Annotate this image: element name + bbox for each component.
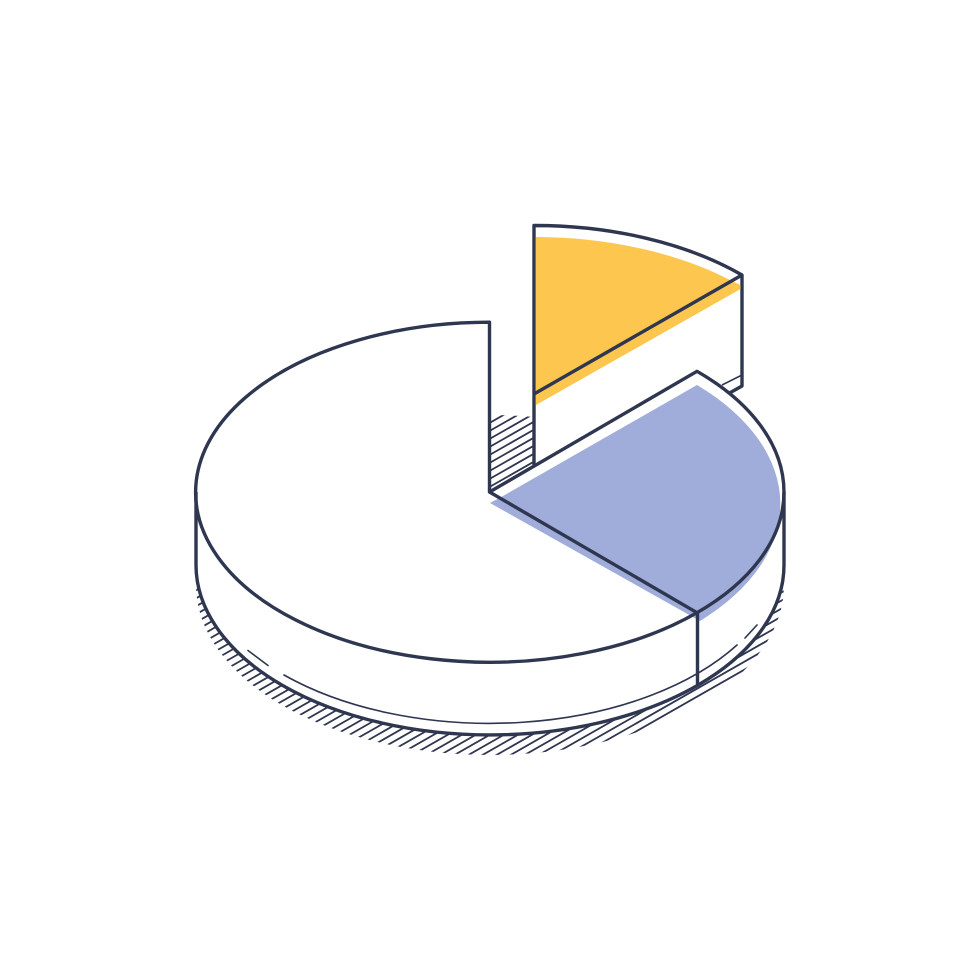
raised yellow slice: [534, 225, 742, 500]
pie silhouette: [196, 322, 784, 735]
pie side outline: [196, 492, 784, 735]
main pie body: [196, 322, 784, 735]
yellow slice front edge: [534, 275, 742, 394]
yellow slice inner base line: [722, 376, 741, 385]
isometric pie chart illustration: [194, 224, 786, 755]
yellow slice body: [534, 225, 742, 500]
side highlight lines: [248, 625, 757, 723]
hatched ground shadow: [196, 415, 784, 755]
yellow slice top fill: [536, 237, 740, 405]
pie top surface outline: [196, 322, 784, 662]
blue slice fill: [490, 385, 780, 621]
